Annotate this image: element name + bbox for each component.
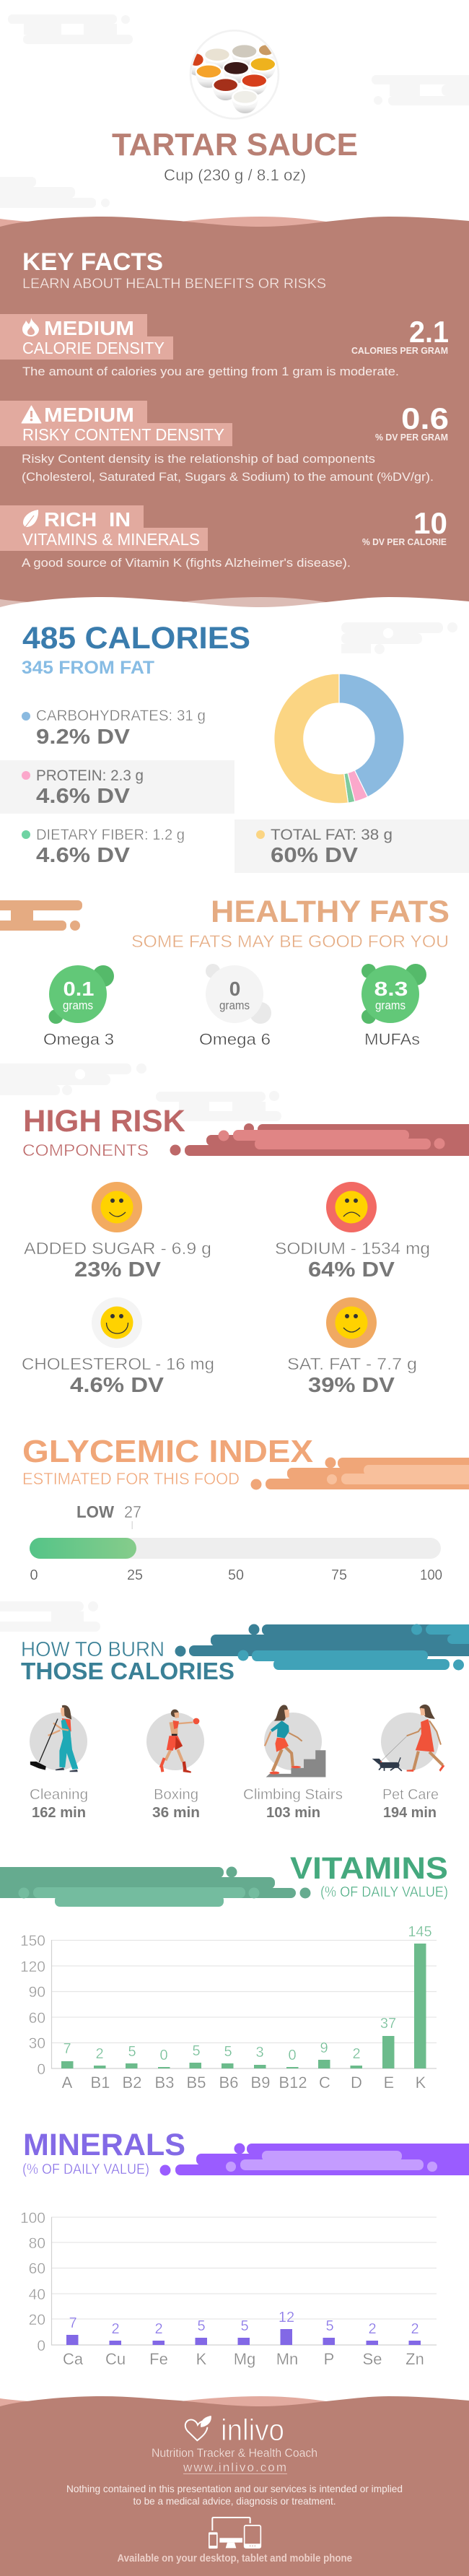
donut chart — [274, 674, 404, 804]
bar chart: vitamins: 0 — [37, 2061, 45, 2078]
background cloud — [341, 622, 457, 654]
fact: vitamins and minerals: % DV PER CALORIE — [362, 536, 447, 547]
fact: vitamins and minerals: A good source of Vitamin K (fights Alzheimer's disease). — [22, 556, 351, 570]
legend: carbohydrates: 9.2% DV — [36, 726, 131, 749]
bar chart: minerals: 20 — [29, 2312, 45, 2328]
bar chart: vitamins: B1 — [91, 2074, 110, 2092]
heading: those calories: THOSE CALORIES — [21, 1658, 234, 1685]
heading: vitamins: VITAMINS — [290, 1851, 448, 1886]
legend: carbohydrates: CARBOHYDRATES: 31 g — [36, 708, 206, 724]
label: low 27: 27 — [124, 1502, 141, 1521]
bar chart: vitamins: 145 — [408, 1924, 432, 1940]
bar chart: minerals: Mn — [276, 2350, 298, 2368]
bar chart: vitamins: 37 — [380, 2016, 396, 2032]
gauge scale: 25 — [127, 1567, 143, 1583]
bar chart: vitamins: 5 — [192, 2043, 201, 2059]
background clouds: header — [0, 14, 469, 208]
bar chart: vitamins: 7 — [63, 2041, 71, 2057]
bar chart: minerals: K — [196, 2350, 207, 2368]
stat: omega 3: 0.1 — [63, 978, 94, 1000]
fact: risky content density: RISKY CONTENT DENSITY — [22, 425, 224, 444]
stat: omega 6 — [199, 964, 271, 1048]
bar chart: minerals: 2 — [111, 2321, 120, 2337]
legend: protein: PROTEIN: 2.3 g — [36, 767, 144, 784]
wave: footer top — [0, 2396, 469, 2576]
bar chart: minerals: 60 — [29, 2260, 45, 2277]
stat: MUFAs: 8.3 — [374, 978, 408, 1000]
bar chart: vitamins: 5 — [224, 2044, 232, 2060]
gauge scale: 75 — [331, 1567, 347, 1583]
stat: omega 6: 0 — [229, 978, 240, 1000]
gauge scale: 100 — [420, 1567, 442, 1583]
fact: risky content density: % DV PER GRAM — [375, 432, 448, 443]
tagline: Nutrition Tracker & Health Coach — [152, 2446, 317, 2460]
activity: pet care — [372, 1705, 444, 1821]
disclaimer: to be a medical advice, diagnosis or treatment. — [133, 2495, 336, 2507]
legend: dietary fiber: 4.6% DV — [36, 844, 131, 867]
bar chart: vitamins: 90 — [29, 1984, 45, 2001]
activity: boxing: Boxing — [154, 1787, 198, 1803]
stat: omega 3: grams — [63, 998, 93, 1012]
stat: omega 6: Omega 6 — [199, 1030, 271, 1048]
component: saturated fat: 39% DV — [308, 1374, 395, 1397]
bar chart: minerals: 12 — [279, 2310, 294, 2325]
availability note: Available on your desktop, tablet and mobile phone — [117, 2552, 352, 2564]
decorative bars — [160, 2143, 469, 2176]
component: cholesterol: 4.6% DV — [70, 1374, 165, 1397]
bar chart: minerals: Ca — [63, 2350, 84, 2368]
fact: calorie density — [0, 314, 449, 378]
component: added sugar: 23% DV — [74, 1258, 162, 1282]
fact: calorie density: CALORIE DENSITY — [22, 339, 165, 357]
bar chart: minerals: Cu — [105, 2350, 126, 2368]
panel: calories — [0, 621, 469, 873]
logo: heart and leaf — [185, 2416, 211, 2440]
decorative bars — [0, 1867, 310, 1907]
icon: person sweeping — [30, 1705, 78, 1772]
activity: cleaning: Cleaning — [30, 1787, 88, 1803]
bar chart: minerals — [20, 2210, 437, 2368]
fact: risky content density: Risky Content density is the relationship of bad components — [22, 452, 375, 466]
icon: smiling face — [326, 1297, 377, 1348]
activity: pet care: Pet Care — [382, 1787, 439, 1803]
bar chart: minerals: 5 — [325, 2318, 334, 2334]
fact: calorie density: The amount of calories you are getting from 1 gram is moderate. — [22, 365, 399, 378]
fact: risky content density: (Cholesterol, Saturated Fat, Sugars & Sodium) to the amount (%DV/gr). — [22, 470, 434, 484]
gauge scale: 0 — [30, 1567, 38, 1583]
icon: person on stairs — [265, 1705, 325, 1777]
legend: dietary fiber: DIETARY FIBER: 1.2 g — [36, 827, 185, 843]
bar chart: vitamins: B3 — [155, 2074, 174, 2092]
stat: omega 3 — [43, 965, 114, 1048]
bar chart: vitamins: D — [351, 2074, 362, 2092]
fact: vitamins and minerals: VITAMINS & MINERALS — [22, 530, 200, 549]
heading: glycemic index: GLYCEMIC INDEX — [22, 1434, 313, 1469]
wave: key facts top — [0, 217, 469, 614]
panel: high risk components — [0, 1063, 469, 1397]
bar chart: vitamins: 60 — [29, 2010, 45, 2027]
bar chart: vitamins: 30 — [29, 2035, 45, 2052]
bar chart: vitamins: B5 — [187, 2074, 206, 2092]
bar chart: vitamins: E — [384, 2074, 394, 2092]
legend: total fat — [234, 819, 469, 873]
disclaimer: Nothing contained in this presentation and our services is intended or implied — [66, 2483, 403, 2494]
component: added sugar — [24, 1182, 211, 1282]
website link: www.inlivo.com — [183, 2460, 286, 2474]
bar chart: minerals: 5 — [197, 2318, 206, 2334]
wave: key facts bottom — [0, 597, 469, 619]
icon: big smile face — [92, 1297, 142, 1348]
icon: person walking dog — [372, 1705, 444, 1772]
subheading: SOME FATS MAY BE GOOD FOR YOU — [131, 932, 449, 952]
stat: omega 6: grams — [219, 998, 250, 1012]
heading: minerals: MINERALS — [23, 2128, 185, 2162]
decorative bars — [251, 1457, 469, 1490]
label: low 27: LOW — [76, 1502, 114, 1521]
bar chart: vitamins: C — [319, 2074, 330, 2092]
bar chart: minerals: 5 — [240, 2318, 249, 2334]
heading: high risk: HIGH RISK — [23, 1104, 185, 1139]
heading: how to burn: HOW TO BURN — [21, 1638, 165, 1661]
bar chart: vitamins: 0 — [159, 2048, 168, 2063]
bar chart: minerals: 7 — [69, 2315, 77, 2331]
decorative bars — [170, 1123, 469, 1156]
subheading: (% OF DAILY VALUE) — [320, 1884, 448, 1900]
stat: MUFAs: grams — [375, 998, 406, 1012]
component: sodium: 64% DV — [308, 1258, 395, 1282]
bar chart: vitamins: 150 — [20, 1933, 45, 1949]
activity: cleaning: 162 min — [32, 1805, 86, 1821]
legend: total fat: TOTAL FAT: 38 g — [271, 827, 393, 843]
icon: flame — [22, 318, 39, 336]
activity: climbing stairs: Climbing Stairs — [243, 1787, 343, 1803]
bar chart: vitamins: B6 — [219, 2074, 238, 2092]
component: cholesterol — [22, 1297, 214, 1397]
bar chart: vitamins: A — [62, 2074, 73, 2092]
fact: vitamins and minerals — [0, 505, 447, 570]
bar chart: minerals: 0 — [37, 2338, 45, 2354]
panel: footer — [0, 2396, 469, 2576]
fact: risky content density — [0, 401, 449, 484]
stat: MUFAs: MUFAs — [364, 1030, 420, 1048]
gauge bar — [30, 1538, 441, 1559]
panel: how to burn calories — [0, 1601, 469, 1821]
component: sodium — [275, 1182, 430, 1282]
bar chart: minerals: Zn — [406, 2350, 424, 2368]
legend: protein: 4.6% DV — [36, 785, 131, 808]
activity: cleaning — [30, 1705, 88, 1821]
bar chart: minerals: 2 — [368, 2321, 377, 2337]
decorative bars — [0, 900, 82, 931]
bar chart: vitamins — [20, 1924, 437, 2092]
bar chart: vitamins: B2 — [123, 2074, 141, 2092]
serving size: Cup (230 g / 8.1 oz) — [164, 166, 306, 184]
subheading: components: COMPONENTS — [22, 1141, 149, 1159]
subheading: ESTIMATED FOR THIS FOOD — [22, 1469, 240, 1488]
bar chart: minerals: 2 — [411, 2321, 419, 2337]
legend: protein — [0, 760, 234, 814]
icon: warning — [22, 406, 41, 423]
icon: leaf — [23, 510, 38, 527]
activity: pet care: 194 min — [383, 1805, 437, 1821]
bar chart: minerals: 40 — [29, 2286, 45, 2303]
background clouds — [0, 1063, 281, 1121]
bar chart: minerals: Mg — [234, 2350, 255, 2368]
bar chart: vitamins: B9 — [251, 2074, 270, 2092]
label: low 27 — [76, 1502, 141, 1529]
bar chart: vitamins: 5 — [128, 2044, 136, 2060]
bar chart: vitamins: 2 — [95, 2046, 104, 2062]
panel: vitamins — [0, 1851, 448, 2092]
icon: frowning face — [326, 1182, 377, 1232]
gauge scale — [30, 1567, 442, 1583]
panel: minerals — [20, 2128, 469, 2368]
bar chart: vitamins: 3 — [255, 2045, 264, 2061]
bar chart: minerals: 2 — [154, 2321, 163, 2337]
bar chart: vitamins: K — [416, 2074, 426, 2092]
bar chart: minerals: Se — [363, 2350, 382, 2368]
title: TARTAR SAUCE — [112, 127, 358, 162]
panel: healthy fats — [0, 895, 450, 1048]
stat: omega 3: Omega 3 — [43, 1030, 114, 1048]
legend: dietary fiber — [22, 827, 185, 867]
background cloud — [0, 1601, 100, 1632]
bar chart: vitamins: 120 — [20, 1959, 45, 1975]
bar chart: vitamins: 0 — [288, 2048, 297, 2063]
component: added sugar: ADDED SUGAR - 6.9 g — [24, 1239, 211, 1258]
bar chart: minerals: P — [324, 2350, 334, 2368]
stat: MUFAs — [361, 964, 426, 1048]
component: sodium: SODIUM - 1534 mg — [275, 1239, 430, 1258]
activity: climbing stairs — [243, 1705, 343, 1821]
component: saturated fat — [287, 1297, 417, 1397]
subheading: from fat: 345 FROM FAT — [22, 658, 154, 678]
bar chart: minerals: Fe — [149, 2350, 168, 2368]
fact: calorie density: 2.1 — [409, 315, 449, 349]
icon: smiling face — [92, 1182, 142, 1232]
component: saturated fat: SAT. FAT - 7.7 g — [287, 1354, 417, 1373]
subheading: LEARN ABOUT HEALTH BENEFITS OR RISKS — [22, 276, 326, 292]
fact: vitamins and minerals: 10 — [413, 506, 447, 540]
logo text: inlivo — [221, 2413, 284, 2447]
panel: key facts — [0, 217, 469, 619]
gauge scale: 50 — [228, 1567, 244, 1583]
food image: bowls of sauce — [185, 30, 279, 118]
fact: risky content density: 0.6 — [401, 401, 449, 435]
activity: boxing: 36 min — [152, 1805, 200, 1821]
legend: total fat: 60% DV — [271, 844, 359, 867]
activity: climbing stairs: 103 min — [266, 1805, 320, 1821]
component: cholesterol: CHOLESTEROL - 16 mg — [22, 1354, 214, 1373]
subheading: (% OF DAILY VALUE) — [22, 2162, 149, 2177]
panel: glycemic index — [22, 1434, 469, 1583]
bar chart: vitamins: 9 — [320, 2040, 328, 2056]
bar chart: minerals: 80 — [29, 2235, 45, 2252]
fact: calorie density: MEDIUM — [44, 317, 134, 339]
heading: calories: 485 CALORIES — [22, 621, 250, 656]
bar chart: minerals: 100 — [20, 2210, 45, 2227]
fact: risky content density: MEDIUM — [44, 404, 134, 426]
fact: calorie density: CALORIES PER GRAM — [351, 345, 448, 356]
icon: boxer — [161, 1710, 199, 1773]
decorative bars — [175, 1624, 469, 1671]
disclaimer — [66, 2483, 403, 2507]
heading: key facts: KEY FACTS — [22, 248, 163, 276]
icon: devices — [209, 2518, 260, 2549]
bar chart: vitamins: 2 — [352, 2046, 361, 2062]
bar chart: vitamins: B12 — [279, 2074, 307, 2092]
legend: carbohydrates — [22, 708, 206, 749]
fact: vitamins and minerals: RICH IN — [44, 508, 131, 531]
heading: healthy fats: HEALTHY FATS — [211, 895, 450, 929]
activity: boxing — [146, 1710, 204, 1821]
